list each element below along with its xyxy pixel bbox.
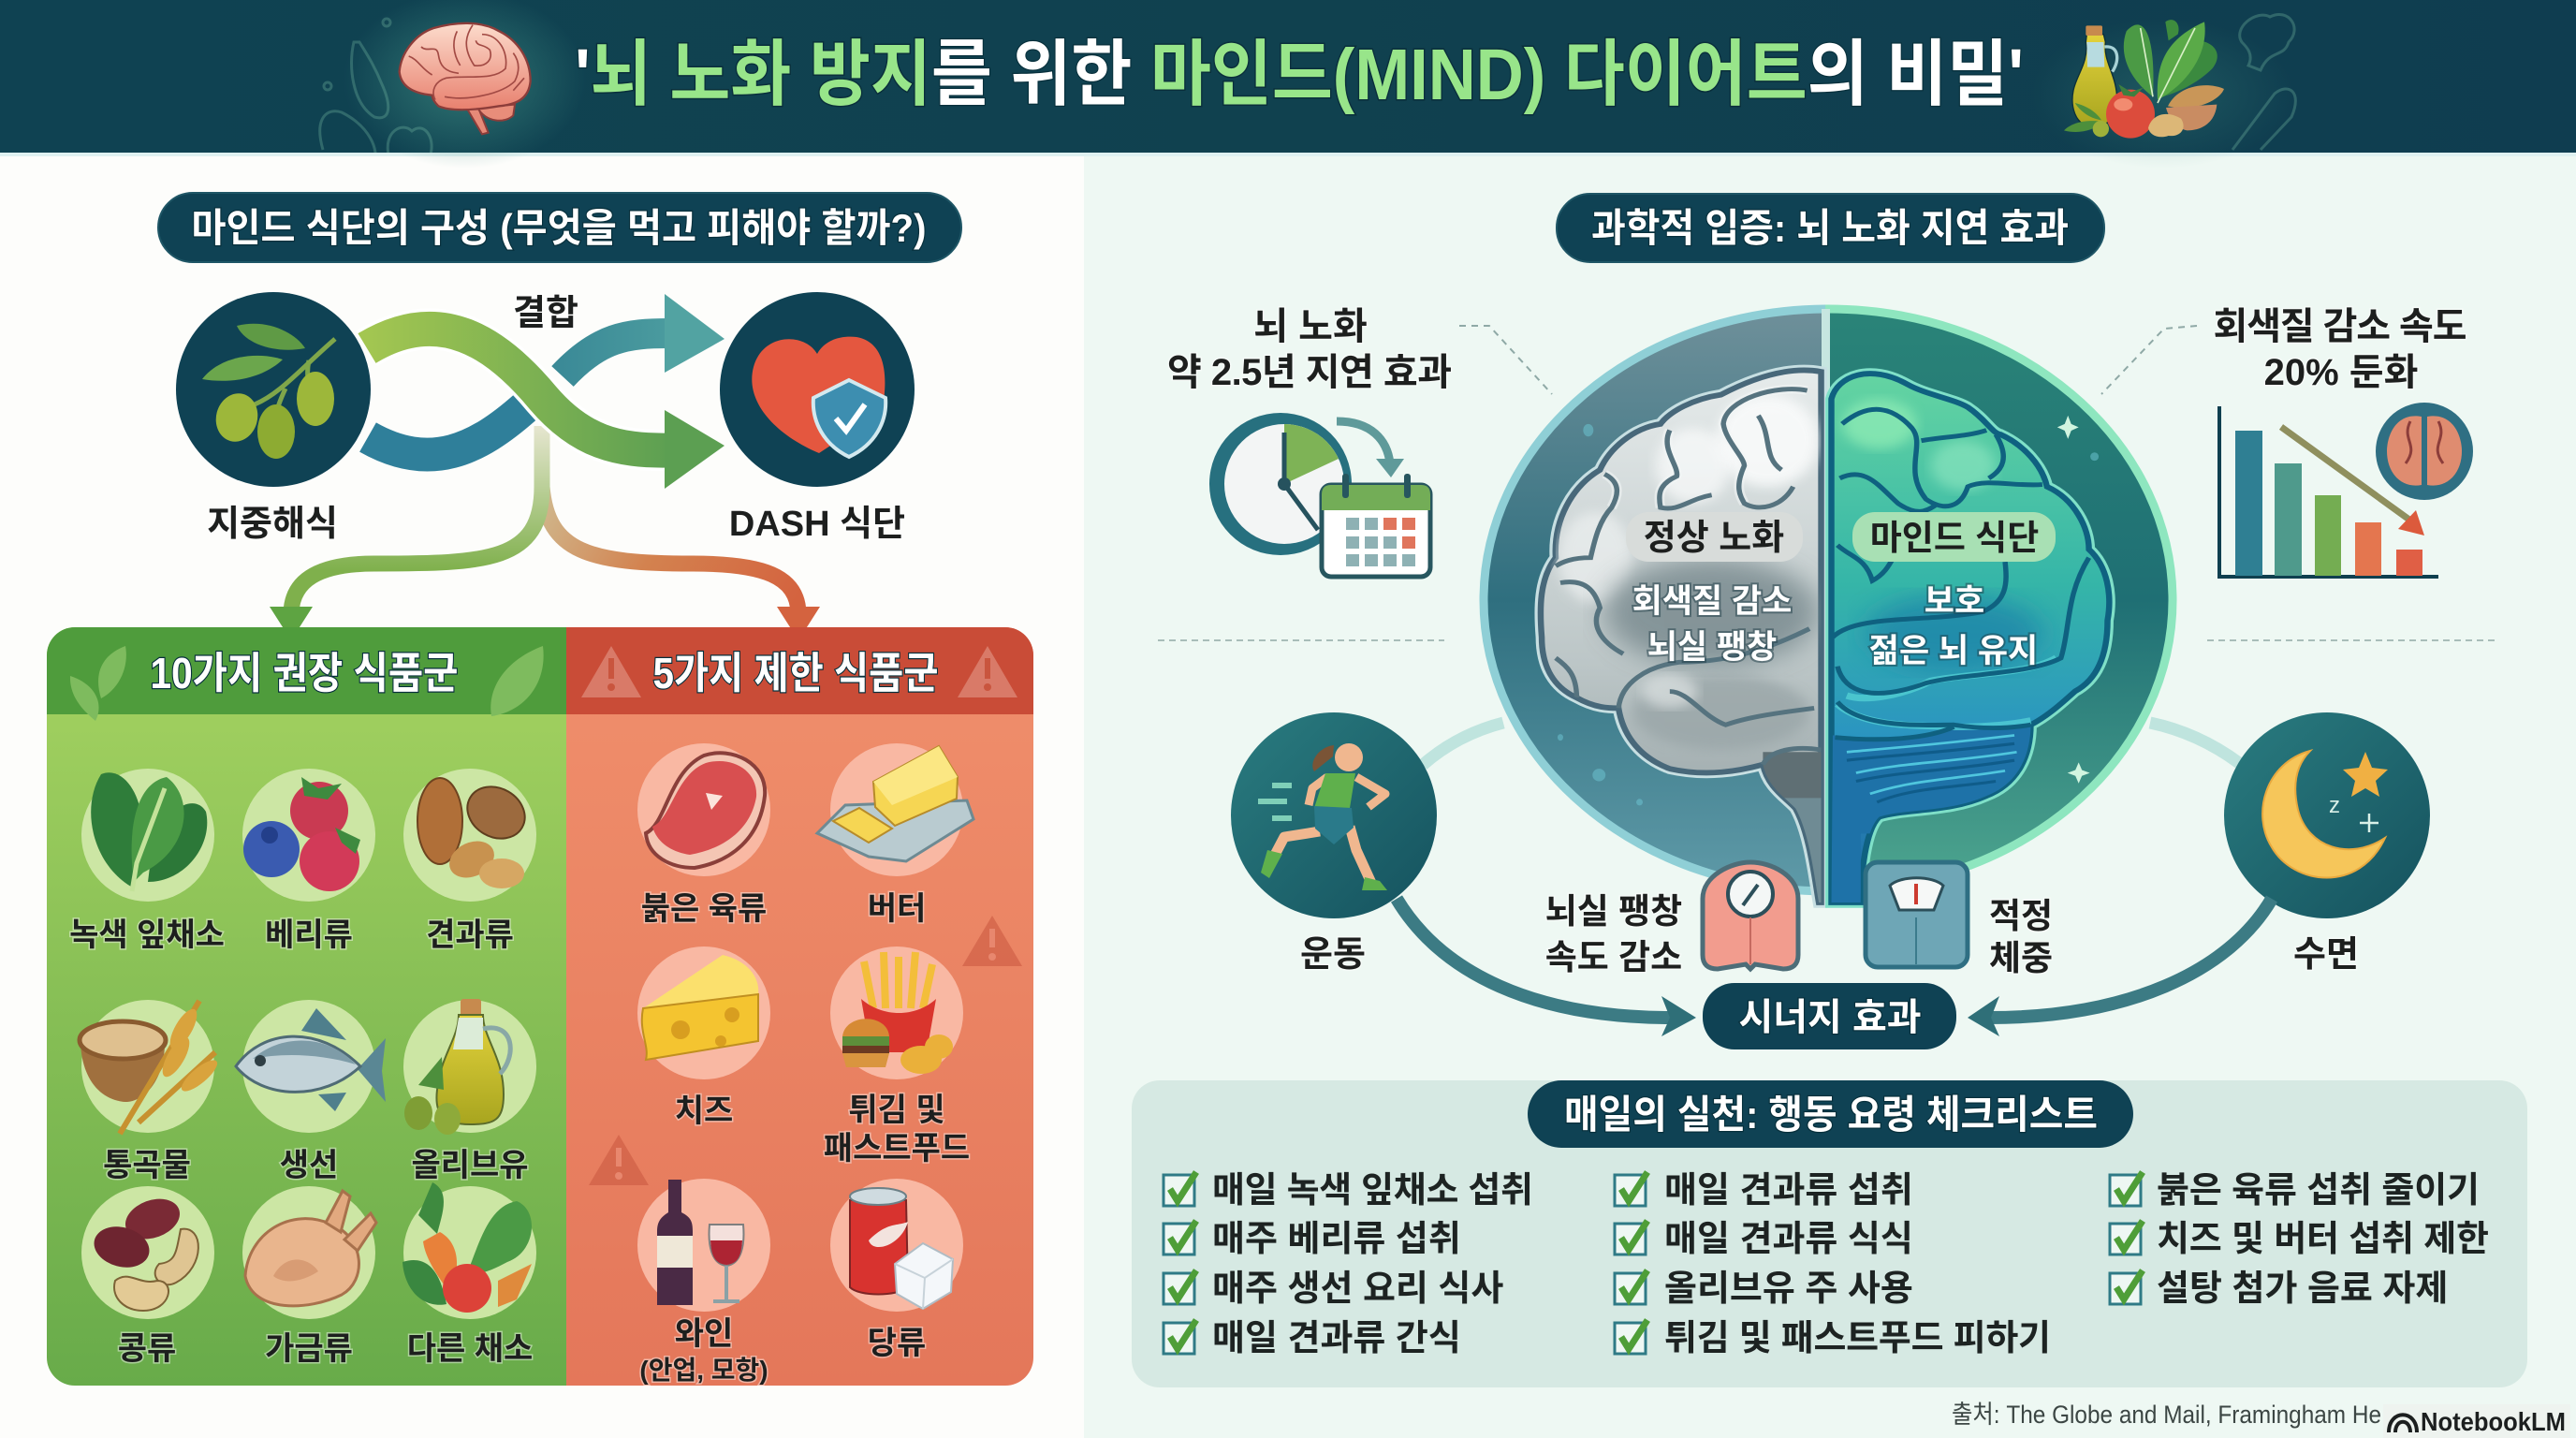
- label pill: 마인드 식단: [1852, 512, 2056, 562]
- label: 와인: 와인: [675, 1316, 733, 1352]
- text: checklist column 1: 매주 베리류 섭취: [1212, 1220, 1461, 1259]
- heading pill: checklist: [1528, 1080, 2133, 1148]
- label: 튀김 및 패스트푸드: 튀김 및: [848, 1093, 945, 1128]
- text: checklist column 2: 매일 견과류 식식: [1664, 1220, 1913, 1259]
- arrow: exercise to synergy: [1397, 899, 1696, 1036]
- icon: fries and burger: [830, 946, 963, 1079]
- icon: soda and sugar: [830, 1179, 963, 1312]
- label: 콩류: [118, 1331, 176, 1367]
- label: 가금류: [265, 1331, 353, 1367]
- title: '뇌 노화 방지를 위한 마인드(MIND) 다이어트의 비밀': [575, 35, 2024, 115]
- label: 녹색 잎채소: [69, 917, 225, 953]
- label: ventricle speed: 속도 감소: [1545, 938, 1682, 976]
- icon: pink scale: [1703, 862, 1798, 969]
- icon: moon circle: z: [2329, 793, 2340, 818]
- panel: food groups: [47, 627, 1033, 1386]
- icon: olive branch circle: [176, 292, 371, 487]
- heading pill: diet composition: [158, 193, 961, 262]
- illustration: split brain: [1484, 309, 2173, 904]
- text: checklist column 3: 붉은 육류 섭취 줄이기: [2157, 1171, 2480, 1211]
- text: checklist column 2: 매일 견과류 섭취: [1664, 1171, 1913, 1211]
- icon: fish: [236, 1000, 386, 1133]
- callout: 2.5 year delay: [1167, 306, 1452, 393]
- label: 치즈: [675, 1093, 733, 1129]
- label: ventricle speed: 뇌실 팽창: [1545, 892, 1682, 931]
- label: healthy weight: 적정: [1989, 897, 2053, 935]
- icon: berries: [242, 769, 375, 902]
- icon: poultry: [242, 1186, 376, 1319]
- icon: header warning triangles: [581, 646, 1022, 1185]
- text: MIND effects: 보호: [1925, 583, 1984, 620]
- panel: right background: [1084, 153, 2576, 1438]
- label: 생선: [280, 1148, 338, 1183]
- right hemisphere: MIND diet: [1832, 374, 2109, 904]
- label: 패스트푸드: [824, 1131, 970, 1167]
- label pill: 정상 노화: [1626, 512, 1803, 562]
- icon: red meat: [637, 743, 770, 876]
- icon: ghost vegetables right: [2240, 14, 2294, 70]
- label: 결합: 결합: [513, 294, 578, 333]
- label: ventricle speed: [1545, 892, 1682, 976]
- label: 다른 채소: [407, 1331, 533, 1367]
- icon: nuts: [403, 769, 536, 902]
- text: checklist column 1: 매일 견과류 간식: [1212, 1319, 1461, 1358]
- arrow: green ribbon: [367, 329, 669, 450]
- icon: whole grains: [80, 1000, 222, 1134]
- arrow: teal ribbon: [368, 407, 525, 455]
- label pill: 정상 노화: 정상 노화: [1644, 519, 1784, 558]
- icon: ghost vegetables left: [320, 14, 2295, 164]
- label: 베리류: [265, 917, 353, 953]
- label: healthy weight: [1989, 897, 2053, 977]
- text: MIND effects: [1869, 583, 2038, 669]
- text: MIND effects: 젊은 뇌 유지: [1869, 633, 2038, 669]
- left hemisphere: normal aging: [1541, 370, 1823, 904]
- text: checklist column 3: 설탕 첨가 음료 자제: [2157, 1269, 2448, 1309]
- label: 수면: 수면: [2293, 935, 2359, 975]
- callout: grey matter: 20% 둔화: [2264, 352, 2418, 393]
- arrow: connector arcs from exercise and sleep: [1423, 723, 2239, 765]
- callout: 2.5 year delay: 약 2.5년 지연 효과: [1167, 352, 1452, 393]
- text: checklist column 1: 매일 녹색 잎채소 섭취: [1212, 1171, 1533, 1211]
- label: 지중해식: 지중해식: [207, 505, 338, 544]
- arrow: stem to green panel: [291, 426, 542, 613]
- text: checklist column 2: [1664, 1171, 2051, 1358]
- label: 올리브유: [411, 1148, 529, 1183]
- callout: 2.5 year delay: 뇌 노화: [1253, 306, 1368, 347]
- text: checklist column 3: [2157, 1171, 2489, 1309]
- callout: grey matter: [2213, 306, 2467, 393]
- label pill: 마인드 식단: 마인드 식단: [1870, 519, 2039, 557]
- label: DASH 식단: DASH 식단: [729, 505, 905, 544]
- label: 버터: [868, 891, 926, 927]
- heading pill: checklist: 매일의 실천: 행동 요령 체크리스트: [1564, 1093, 2098, 1137]
- callout: grey matter: 회색질 감소 속도: [2213, 306, 2467, 347]
- label: 붉은 육류: [641, 891, 767, 927]
- icon: butter: [817, 743, 973, 876]
- icon: blue scale: [1866, 862, 1968, 967]
- pill: synergy: [1703, 983, 1956, 1049]
- label: healthy weight: 체중: [1989, 939, 2053, 977]
- source note: 출처: The Globe and Mail, Framingham He: [1952, 1401, 2381, 1429]
- chart: declining bars with brain: [2219, 403, 2473, 577]
- icon: wine: [637, 1179, 770, 1312]
- icon: runner circle: [1231, 712, 1437, 918]
- icon: vegetables: [402, 1182, 536, 1319]
- icon: oil, leaves, tomato, nuts cluster: [2064, 20, 2224, 139]
- icon: olive oil: [403, 999, 536, 1135]
- heading pill: diet composition: 마인드 식단의 구성 (무엇을 먹고 피해야 할까?): [191, 206, 927, 250]
- text: normal aging effects: 뇌실 팽창: [1647, 629, 1777, 666]
- label: (안업, 모항): [639, 1356, 768, 1385]
- heading: limited: 5가지 제한 식품군: [653, 649, 938, 697]
- icon: header leaves: [70, 646, 544, 721]
- text: normal aging effects: 회색질 감소: [1632, 583, 1792, 620]
- text: checklist column 3: 치즈 및 버터 섭취 제한: [2157, 1220, 2489, 1259]
- icon: moon circle: [2224, 712, 2430, 918]
- NotebookLM badge: [2383, 1404, 2570, 1438]
- icons: check boxes: [1164, 1175, 2141, 1354]
- icon: mini brain: [2376, 403, 2473, 500]
- arrow: sleep to synergy: [1968, 899, 2272, 1036]
- heading: recommended: 10가지 권장 식품군: [150, 649, 459, 697]
- sparkles: [2057, 416, 2090, 784]
- icon: beans: [81, 1186, 214, 1319]
- arrow: stem to red panel: [542, 440, 798, 613]
- text: checklist column 1: 매주 생선 요리 식사: [1212, 1269, 1503, 1309]
- icon: cheese: [637, 946, 770, 1079]
- text: normal aging effects: [1632, 583, 1792, 666]
- text: checklist column 1: [1212, 1171, 1533, 1358]
- header banner: [0, 0, 2576, 169]
- NotebookLM badge: NotebookLM: [2421, 1407, 2566, 1436]
- icon: pink brain: [400, 23, 531, 134]
- label: 당류: [868, 1326, 926, 1361]
- icon: spinach: [81, 769, 214, 902]
- diagram: combination ribbons and arrows: [270, 294, 820, 640]
- label: 견과류: [426, 917, 514, 953]
- heading pill: scientific evidence: [1557, 194, 2104, 262]
- text: checklist column 2: 올리브유 주 사용: [1664, 1269, 1913, 1309]
- label: 통곡물: [103, 1148, 191, 1183]
- panel: checklist: [1132, 1080, 2527, 1387]
- pill: synergy: 시너지 효과: [1738, 997, 1922, 1038]
- text: checklist column 2: 튀김 및 패스트푸드 피하기: [1664, 1319, 2051, 1358]
- heading pill: scientific evidence: 과학적 입증: 뇌 노화 지연 효과: [1591, 206, 2069, 250]
- icon: clock and calendar: [1209, 413, 1430, 577]
- icon: heart and shield circle: [720, 292, 915, 487]
- label: 운동: 운동: [1300, 935, 1366, 975]
